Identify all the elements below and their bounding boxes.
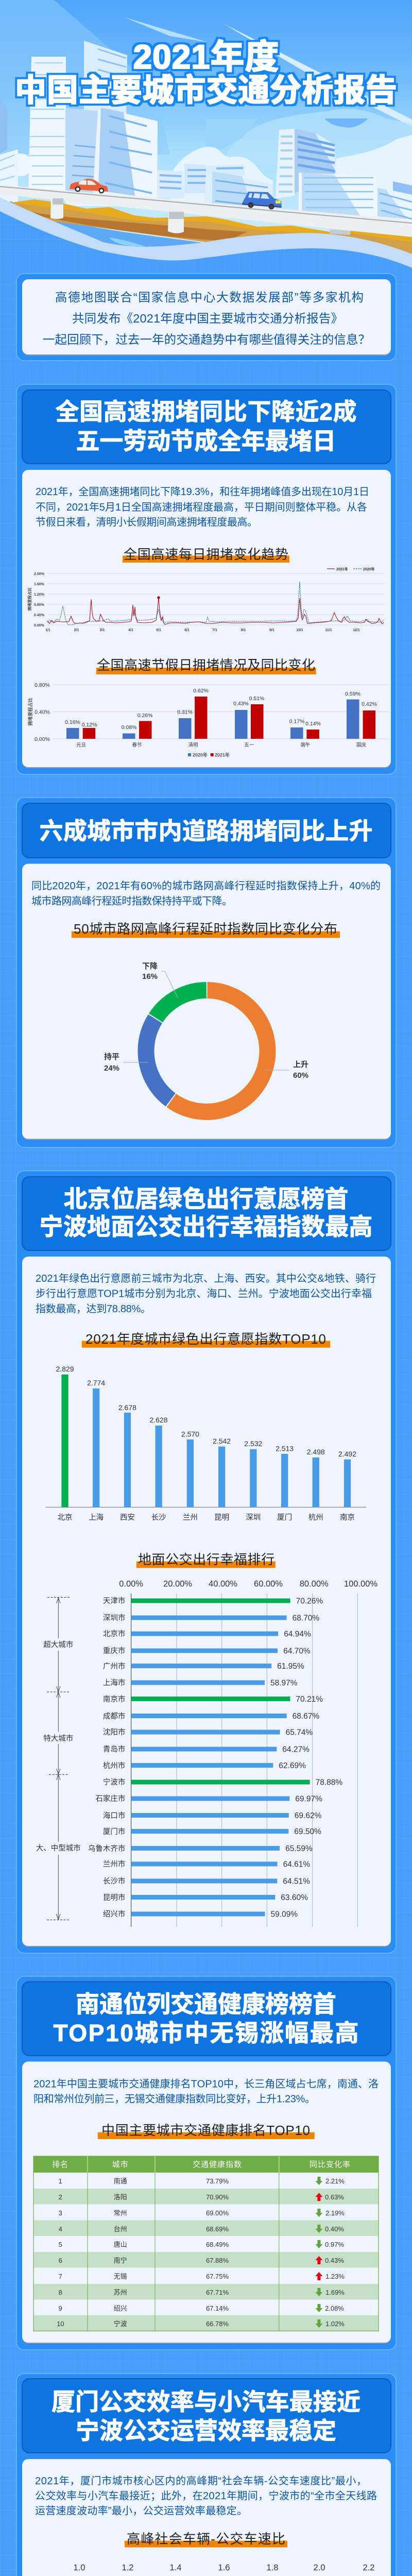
horizontal bar chart: bus happiness: 69.50% <box>294 1827 321 1836</box>
horizontal bar chart: speed ratio: 1.6 <box>218 2563 230 2572</box>
body text: 2021年中国主要城市交通健康排名TOP10中，长三角区域占七席，南通、洛 <box>33 2078 379 2090</box>
table: traffic health: 3 <box>59 2209 62 2217</box>
horizontal bar chart: bus happiness: 南京市 <box>103 1695 125 1704</box>
table: traffic health: 68.69% <box>206 2225 229 2233</box>
horizontal bar chart: bus happiness: 海口市 <box>103 1811 125 1820</box>
line chart: daily congestion: 4/1 <box>128 629 133 632</box>
horizontal bar chart: bus happiness: 20.00% <box>163 1580 192 1589</box>
horizontal bar chart: bus happiness: 厦门市 <box>103 1827 125 1836</box>
main title <box>15 38 397 108</box>
city tier bracket <box>36 1597 81 1920</box>
horizontal bar chart: bus happiness: 重庆市 <box>103 1647 125 1655</box>
intro text: 一起回顾下，过去一年的交通趋势中有哪些值得关注的信息？ <box>43 333 370 346</box>
section header <box>22 1177 391 1250</box>
line chart: daily congestion: 5/1 <box>156 629 161 632</box>
horizontal bar chart: bus happiness: 100.00% <box>344 1580 377 1589</box>
horizontal bar chart: speed ratio: 1.4 <box>170 2563 181 2572</box>
table: traffic health: 0.63% <box>325 2193 344 2201</box>
table: traffic health: 同比变化率 <box>310 2160 351 2169</box>
table: traffic health: 67.71% <box>206 2289 229 2296</box>
table: traffic health: 洛阳 <box>114 2193 127 2201</box>
horizontal bar chart: bus happiness: 64.94% <box>284 1630 311 1638</box>
section header: TOP10城市中无锡涨幅最高 <box>54 2020 358 2046</box>
horizontal bar chart: speed ratio: 1.8 <box>267 2563 278 2572</box>
horizontal bar chart: bus happiness: 68.67% <box>293 1712 319 1721</box>
horizontal bar chart: speed ratio <box>37 2563 374 2576</box>
column chart: green travel: 厦门 <box>277 1513 292 1522</box>
horizontal bar chart: bus happiness: 64.70% <box>283 1647 311 1656</box>
table: traffic health: 0.40% <box>325 2225 344 2233</box>
middle low buildings <box>157 170 184 198</box>
table: traffic health: 排名 <box>52 2160 68 2169</box>
column chart: green travel: 2.492 <box>338 1450 356 1458</box>
table: traffic health: 2.19% <box>325 2209 345 2217</box>
line chart: daily congestion: 10/1 <box>296 629 303 632</box>
horizontal bar chart: bus happiness: 绍兴市 <box>103 1910 125 1919</box>
table: traffic health: 2.21% <box>325 2177 345 2185</box>
body text: 节假日来看，清明小长假期间高速拥堵程度最高。 <box>36 516 258 528</box>
table: traffic health: 7 <box>59 2273 62 2280</box>
table: traffic health <box>33 2156 379 2331</box>
horizontal bar chart: bus happiness: 68.70% <box>293 1614 319 1623</box>
table: traffic health: 4 <box>59 2225 62 2233</box>
tower back <box>84 41 127 124</box>
section header: 全国高速拥堵同比下降近2成 <box>56 398 356 425</box>
table: traffic health: 2.08% <box>325 2304 344 2312</box>
horizontal bar chart: bus happiness: 成都市 <box>103 1712 125 1721</box>
column chart: green travel: 昆明 <box>214 1514 229 1522</box>
column chart: green travel: 南京 <box>340 1513 355 1522</box>
line chart: daily congestion: 2/1 <box>74 629 79 632</box>
column chart: green travel: 2.498 <box>307 1448 325 1456</box>
horizontal bar chart: bus happiness: 69.62% <box>295 1811 322 1820</box>
horizontal bar chart: speed ratio: 1.0 <box>74 2563 85 2572</box>
intro text <box>43 291 370 346</box>
chart title: daily trend: 全国高速每日拥堵变化趋势 <box>124 547 288 562</box>
horizontal bar chart: bus happiness: 兰州市 <box>103 1860 125 1869</box>
horizontal bar chart: bus happiness: 杭州市 <box>103 1761 125 1770</box>
table: traffic health: 1.23% <box>325 2273 345 2280</box>
line chart: daily congestion: 6/1 <box>184 629 190 632</box>
table: traffic health: 67.88% <box>206 2257 229 2264</box>
chart title: bus happiness: 地面公交出行幸福排行 <box>138 1552 274 1567</box>
horizontal bar chart: bus happiness: 宁波市 <box>103 1778 125 1787</box>
water <box>10 201 206 252</box>
table: traffic health: 70.90% <box>206 2193 229 2201</box>
bar chart: holiday congestion: 0.42% <box>362 701 377 707</box>
main title: 2021年度 <box>133 38 279 76</box>
table: traffic health: 5 <box>59 2241 62 2248</box>
table: traffic health: 6 <box>59 2257 62 2264</box>
bridge deck <box>0 185 412 237</box>
bar chart: holiday congestion <box>27 682 389 757</box>
body text: 2021年绿色出行意愿前三城市为北京、上海、西安。其中公交&地铁、骑行 <box>36 1273 376 1284</box>
icon: red car <box>70 179 108 194</box>
table: traffic health: 2 <box>59 2193 62 2201</box>
bar chart: holiday congestion: 0.26% <box>138 713 152 719</box>
horizontal bar chart: bus happiness: 78.88% <box>316 1778 342 1787</box>
column chart: green travel <box>46 1365 366 1522</box>
table: traffic health: 0.97% <box>325 2241 344 2248</box>
column chart: green travel: 深圳 <box>246 1513 261 1522</box>
line chart: daily congestion: 0.80% <box>34 603 45 607</box>
bar chart: holiday congestion: 拥堵里程占比 <box>27 698 33 726</box>
column chart: green travel: 北京 <box>58 1513 72 1522</box>
donut chart: 24% <box>104 1064 119 1073</box>
horizontal bar chart: bus happiness: 广州市 <box>103 1662 125 1671</box>
line chart: daily congestion: 1.20% <box>34 593 45 597</box>
body text <box>36 486 369 528</box>
horizontal bar chart: bus happiness: 40.00% <box>209 1580 237 1589</box>
line chart: daily congestion: 2020年 <box>363 567 375 571</box>
section header: 厦门公交效率与小汽车最接近 <box>52 2388 360 2415</box>
column chart: green travel: 2.532 <box>244 1439 263 1448</box>
bar chart: holiday congestion: 0.17% <box>289 718 304 724</box>
chart title: distribution: 50城市路网高峰行程延时指数同比变化分布 <box>74 921 337 937</box>
bar chart: holiday congestion: 端午 <box>300 742 310 748</box>
horizontal bar chart: speed ratio: 1.2 <box>122 2563 133 2572</box>
horizontal bar chart: bus happiness: 69.97% <box>295 1795 322 1803</box>
donut chart: 上升 <box>293 1060 308 1069</box>
body text <box>33 2078 379 2105</box>
table: traffic health: 73.79% <box>206 2177 229 2185</box>
column chart: green travel: 西安 <box>120 1513 135 1522</box>
table: traffic health: 南通 <box>114 2177 127 2185</box>
body text: 同比2020年，2021年有60%的城市路网高峰行程延时指数保持上升，40%的 <box>31 880 381 892</box>
chart title: top10: 2021年度城市绿色出行意愿指数TOP10 <box>85 1331 326 1347</box>
column chart: green travel: 长沙 <box>151 1513 166 1522</box>
wide low building <box>299 173 377 219</box>
horizontal bar chart: bus happiness: 70.26% <box>296 1597 323 1605</box>
bar chart: holiday congestion: 0.00% <box>35 736 50 742</box>
bar chart: holiday congestion: 0.31% <box>177 709 193 715</box>
body text <box>36 1273 376 1315</box>
horizontal bar chart: speed ratio: 2.0 <box>314 2563 325 2572</box>
line chart: daily congestion: 0.00% <box>34 624 45 628</box>
horizontal bar chart: bus happiness: 62.69% <box>279 1761 306 1770</box>
table: traffic health: 69.00% <box>206 2209 229 2217</box>
bar chart: holiday congestion: 0.14% <box>305 721 321 727</box>
horizontal bar chart: bus happiness: 上海市 <box>103 1679 125 1687</box>
line chart: daily congestion: 8/1 <box>241 629 246 632</box>
table: traffic health: 交通健康指数 <box>193 2160 242 2169</box>
line chart: daily congestion: 2.00% <box>34 572 45 576</box>
table: traffic health: 1 <box>59 2177 62 2185</box>
body text: 阳和常州位列前三，无锡交通健康指数同比变好，上升1.23%。 <box>33 2093 315 2105</box>
bar chart: holiday congestion: 国庆 <box>356 742 366 748</box>
horizontal bar chart: bus happiness: 深圳市 <box>103 1614 125 1622</box>
horizontal bar chart: bus happiness: 61.95% <box>277 1662 304 1671</box>
donut chart: 下降 <box>142 962 158 971</box>
column chart: green travel: 2.774 <box>87 1379 105 1387</box>
body text <box>35 2475 377 2517</box>
section header: 六成城市市内道路拥堵同比上升 <box>39 818 373 844</box>
line chart: daily congestion: 1/1 <box>45 629 50 632</box>
bar chart: holiday congestion: 清明 <box>188 742 198 748</box>
table: traffic health: 南宁 <box>114 2257 127 2264</box>
bar chart: holiday congestion: 0.43% <box>233 701 249 707</box>
line chart: daily congestion: 3/1 <box>100 629 105 632</box>
column chart: green travel: 2.513 <box>276 1445 294 1453</box>
bar chart: holiday congestion: 2021年 <box>215 752 230 757</box>
horizontal bar chart: bus happiness: 北京市 <box>103 1630 125 1638</box>
chart title: speed ratio: 高峰社会车辆-公交车速比 <box>127 2531 285 2547</box>
section header <box>22 1981 391 2056</box>
page colour below swoosh <box>0 211 412 278</box>
body text: 步行出行意愿TOP1城市分别为北京、海口、兰州。宁波地面公交出行幸福 <box>36 1288 372 1300</box>
table: traffic health: 1.02% <box>325 2320 345 2328</box>
panel: bus efficiency <box>16 2374 396 2576</box>
horizontal bar chart: bus happiness: 昆明市 <box>103 1893 125 1902</box>
table: traffic health: 8 <box>59 2289 62 2296</box>
horizontal bar chart: bus happiness <box>88 1580 377 1927</box>
horizontal bar chart: bus happiness: 60.00% <box>254 1580 283 1589</box>
body text: 不同，2021年5月1日全国高速拥堵程度最高，平日期间则整体平稳。从各 <box>36 501 367 513</box>
pale swoosh band <box>0 197 412 268</box>
left building <box>0 149 18 204</box>
table: traffic health: 1.69% <box>325 2289 345 2296</box>
table: traffic health: 0.43% <box>325 2257 344 2264</box>
table: traffic health: 常州 <box>114 2209 127 2217</box>
bar chart: holiday congestion: 0.59% <box>345 691 360 697</box>
intro text: 共同发布《2021年度中国主要城市交通分析报告》 <box>72 312 343 325</box>
donut chart: 60% <box>293 1071 308 1080</box>
city tier bracket: 超大城市 <box>43 1640 73 1649</box>
intro text: 高德地图联合“国家信息中心大数据发展部”等多家机构 <box>55 291 364 304</box>
horizontal bar chart: bus happiness: 80.00% <box>300 1580 329 1589</box>
chart title: holidays: 全国高速节假日拥堵情况及同比变化 <box>97 657 315 673</box>
horizontal bar chart: speed ratio: 2.2 <box>363 2563 374 2572</box>
donut chart <box>104 962 308 1112</box>
column chart: green travel: 2.628 <box>149 1416 168 1424</box>
donut chart: 16% <box>142 972 158 981</box>
table: traffic health: 台州 <box>114 2225 127 2233</box>
table: traffic health: 绍兴 <box>114 2304 127 2312</box>
horizontal bar chart: bus happiness: 0.00% <box>119 1580 143 1589</box>
section header: 北京位居绿色出行意愿榜首 <box>64 1185 348 1212</box>
chart title: health top10: 中国主要城市交通健康排名TOP10 <box>101 2123 310 2138</box>
bar chart: holiday congestion: 春节 <box>132 742 142 748</box>
line chart: daily congestion: 2021年 <box>336 567 348 571</box>
line chart: daily congestion: 11/1 <box>325 629 332 632</box>
column chart: green travel: 杭州 <box>308 1513 323 1522</box>
table: traffic health: 无锡 <box>114 2273 127 2280</box>
tower B <box>28 57 66 196</box>
section header <box>22 803 391 858</box>
bar chart: holiday congestion: 0.08% <box>122 724 136 731</box>
horizontal bar chart: bus happiness: 63.60% <box>281 1893 308 1902</box>
hero illustration <box>0 0 412 278</box>
body text: 2021年，全国高速拥堵同比下降19.3%，和往年拥堵峰值多出现在10月1日 <box>36 486 369 498</box>
table: traffic health: 67.75% <box>206 2273 229 2280</box>
column chart: green travel: 2.829 <box>56 1365 74 1373</box>
horizontal bar chart: bus happiness: 59.09% <box>271 1910 298 1919</box>
body text: 运营速度波动率”最小，公交运营效率最稳定。 <box>35 2505 247 2517</box>
body text <box>31 880 381 907</box>
bar chart: holiday congestion: 0.40% <box>35 709 50 715</box>
panel: traffic health <box>16 1976 396 2350</box>
bar chart: holiday congestion: 0.51% <box>249 696 264 702</box>
tall tower right <box>276 129 295 198</box>
ground <box>12 199 412 258</box>
donut chart: 持平 <box>104 1053 119 1061</box>
column chart: green travel: 兰州 <box>183 1513 198 1522</box>
panel: green travel <box>16 1171 396 1953</box>
bar chart: holiday congestion: 0.12% <box>82 722 97 728</box>
city tier bracket: 大、中型城市 <box>36 1844 81 1853</box>
panel: highway congestion <box>16 384 396 774</box>
table: traffic health: 9 <box>59 2304 62 2312</box>
horizontal bar chart: bus happiness: 58.97% <box>270 1679 298 1688</box>
body text: 城市路网高峰行程延时指数保持持平或下降。 <box>31 895 232 907</box>
horizontal bar chart: bus happiness: 64.27% <box>282 1745 310 1754</box>
section header: 宁波地面公交出行幸福指数最高 <box>39 1213 373 1240</box>
table: traffic health: 68.49% <box>206 2241 229 2248</box>
bar chart: holiday congestion: 2020年 <box>193 752 208 757</box>
column chart: green travel: 2.542 <box>213 1437 231 1445</box>
horizontal bar chart: bus happiness: 64.51% <box>283 1877 310 1886</box>
line chart: daily congestion: 0.40% <box>34 614 45 617</box>
section header: 五一劳动节成全年最堵日 <box>76 428 336 454</box>
line chart: daily congestion: 拥堵里程占比 <box>27 587 32 611</box>
tower C <box>65 108 100 206</box>
column chart: green travel: 2.678 <box>118 1403 136 1412</box>
table: traffic health: 66.78% <box>206 2320 229 2328</box>
bar chart: holiday congestion: 0.16% <box>65 719 80 725</box>
horizontal bar chart: bus happiness: 65.74% <box>286 1728 313 1737</box>
horizontal bar chart: bus happiness: 沈阳市 <box>103 1728 125 1737</box>
line chart: daily congestion: 12/1 <box>353 629 360 632</box>
horizontal bar chart: bus happiness: 64.61% <box>283 1860 310 1869</box>
table: traffic health: 苏州 <box>114 2289 127 2296</box>
horizontal bar chart: bus happiness: 65.59% <box>285 1844 313 1853</box>
city tier bracket: 特大城市 <box>43 1734 73 1743</box>
bar chart: holiday congestion: 五一 <box>244 742 254 748</box>
line chart: daily congestion: 7/1 <box>212 629 217 632</box>
table: traffic health: 10 <box>57 2320 64 2328</box>
table: traffic health: 67.14% <box>206 2304 229 2312</box>
bar chart: holiday congestion: 元旦 <box>76 742 86 748</box>
horizontal bar chart: bus happiness: 乌鲁木齐市 <box>88 1844 125 1853</box>
column chart: green travel: 上海 <box>89 1513 104 1522</box>
bar chart: holiday congestion: 0.80% <box>35 682 50 688</box>
horizontal bar chart: bus happiness: 青岛市 <box>103 1745 125 1754</box>
panel: intro <box>16 274 396 361</box>
horizontal bar chart: bus happiness: 天津市 <box>103 1597 125 1605</box>
clouds <box>330 135 412 227</box>
panel: urban roads <box>16 798 396 1147</box>
main title: 中国主要城市交通分析报告 <box>15 73 397 108</box>
horizontal bar chart: bus happiness: 70.21% <box>296 1695 323 1704</box>
line chart: daily congestion: 1.60% <box>34 583 45 586</box>
bridge piers <box>50 198 63 219</box>
bar chart: holiday congestion: 0.62% <box>193 688 209 694</box>
table: traffic health: 唐山 <box>114 2241 127 2248</box>
horizontal bar chart: bus happiness: 石家庄市 <box>95 1794 125 1803</box>
table: traffic health: 城市 <box>112 2160 129 2169</box>
tower D <box>98 108 158 206</box>
body text: 指数最高，达到78.88%。 <box>36 1303 151 1315</box>
line chart: daily congestion: 9/1 <box>269 629 274 632</box>
section header: 宁波公交运营效率最稳定 <box>76 2417 336 2444</box>
section header: 南通位列交通健康榜榜首 <box>76 1991 336 2018</box>
table: traffic health: 宁波 <box>114 2320 127 2328</box>
far left building <box>0 100 7 154</box>
column chart: green travel: 2.570 <box>181 1430 199 1438</box>
section header <box>22 2379 391 2453</box>
line chart: daily congestion <box>27 567 384 632</box>
horizontal bar chart: bus happiness: 长沙市 <box>103 1877 125 1886</box>
body text: 2021年，厦门市城市核心区内的高峰期“社会车辆-公交车速度比”最小， <box>35 2475 367 2487</box>
body text: 公交效率与小汽车最接近；此外，在2021年期间，宁波市的“全市全天线路 <box>35 2490 377 2502</box>
section header <box>22 390 391 464</box>
icon: blue car <box>242 192 282 209</box>
right building <box>377 188 412 222</box>
